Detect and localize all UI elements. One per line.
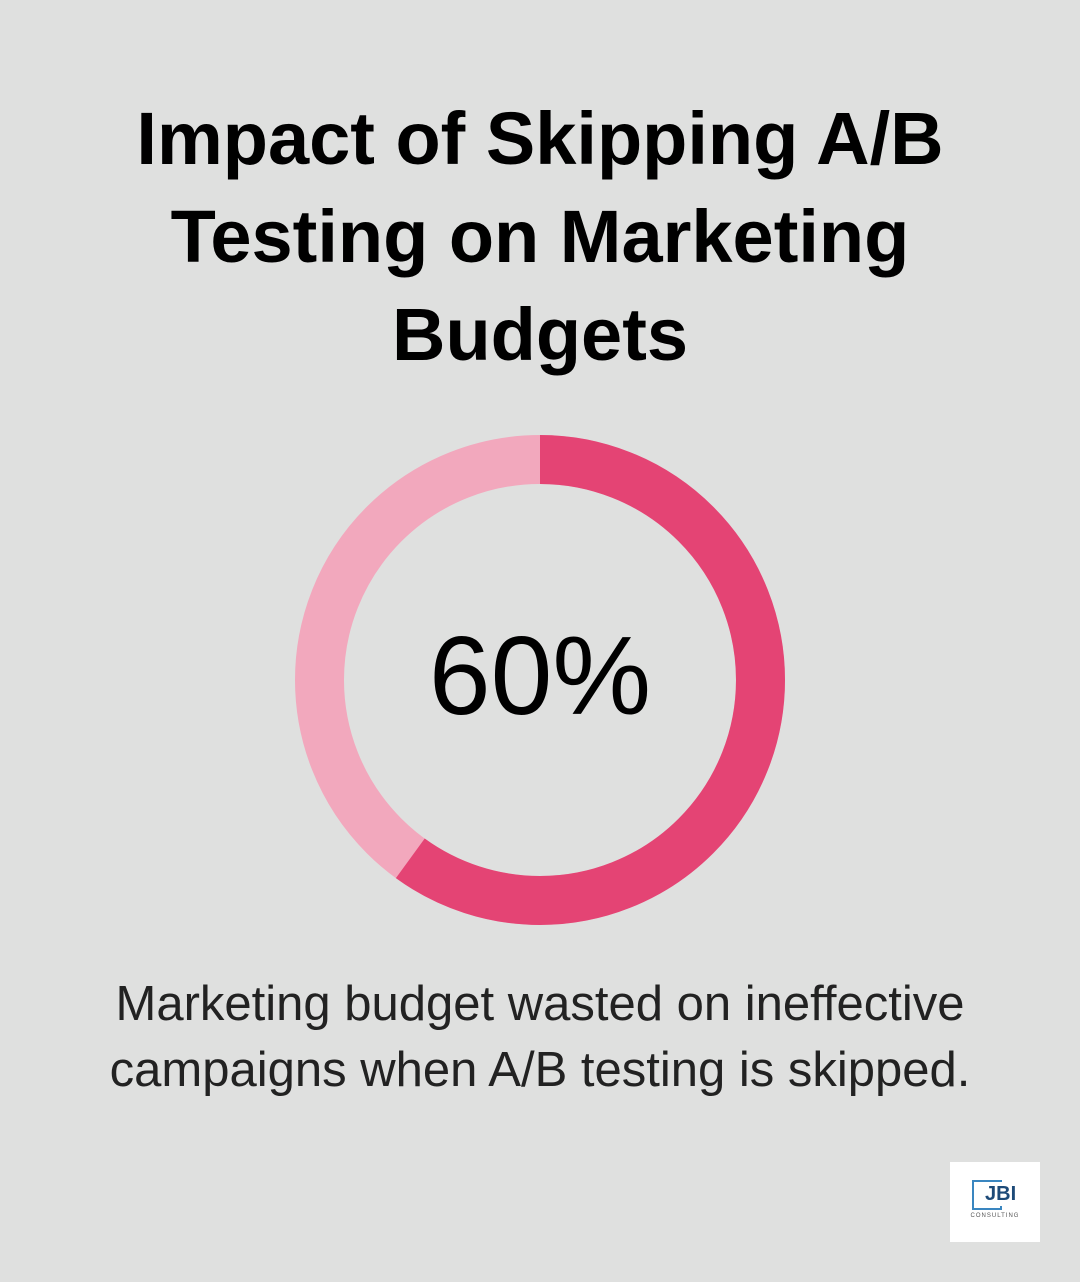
title: Budgets — [392, 293, 688, 376]
caption: campaigns when A/B testing is skipped. — [110, 1043, 970, 1097]
logo: CONSULTING — [971, 1213, 1019, 1219]
logo — [950, 1162, 1040, 1242]
title: Testing on Marketing — [171, 195, 909, 278]
title — [136, 97, 944, 376]
caption — [110, 977, 970, 1097]
logo: JBI — [985, 1183, 1016, 1205]
donut chart: 60% — [429, 614, 651, 738]
title: Impact of Skipping A/B — [136, 97, 944, 180]
caption: Marketing budget wasted on ineffective — [116, 977, 964, 1031]
